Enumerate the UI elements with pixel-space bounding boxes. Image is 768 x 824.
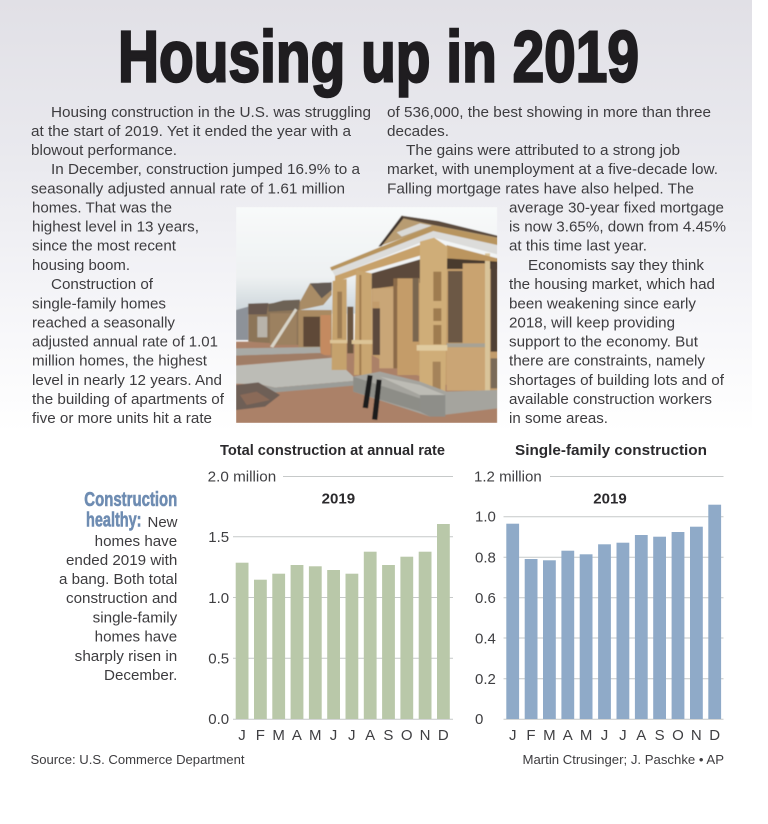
article text: left column: million homes, the highest — [32, 354, 207, 370]
y axis labels: 1.2 million — [474, 469, 542, 486]
article text: right column: average 30-year fixed mortgage — [509, 200, 724, 216]
bars — [236, 524, 450, 719]
concrete slabs — [236, 347, 321, 356]
month labels: S — [655, 727, 665, 744]
month labels: J — [238, 727, 246, 744]
month labels — [238, 727, 449, 744]
article text: right column: Falling mortgage rates have also helped. The — [387, 182, 694, 198]
bars — [506, 505, 721, 719]
article text: left column: single-family homes — [32, 296, 166, 312]
article text: right column: shortages of building lots and of — [509, 373, 725, 389]
article text: right column: market, with unemployment at a five-decade low. — [387, 162, 718, 178]
article text: left column: five or more units hit a rate — [32, 411, 212, 427]
far houses — [236, 307, 248, 340]
y axis labels: 1.0 — [475, 509, 496, 526]
sidebar: construction healthy: sharply risen in — [75, 649, 177, 665]
sidebar: construction healthy: ended 2019 with — [66, 553, 177, 569]
foundation — [353, 372, 497, 417]
article text: left column: adjusted annual rate of 1.01 — [32, 335, 218, 351]
article text: right column: the housing market, which had — [509, 277, 715, 293]
month labels: J — [509, 727, 516, 744]
article text: left column — [31, 105, 371, 427]
month labels: F — [526, 727, 536, 744]
article text: right column: been weakening since early — [509, 296, 697, 312]
black pipes — [363, 375, 373, 408]
month labels: M — [309, 727, 321, 744]
month labels: O — [401, 727, 413, 744]
article text: right column: decades. — [387, 124, 449, 140]
source note: Source: U.S. Commerce Department — [30, 752, 245, 767]
year label: 2019 — [322, 492, 355, 508]
sidebar: construction healthy: New — [148, 515, 178, 531]
porch columns — [332, 279, 347, 370]
y axis labels: 1.0 — [208, 590, 229, 607]
y axis labels: 0.4 — [475, 630, 496, 647]
article text: left column: Housing construction in the U.S. was struggling — [51, 105, 371, 121]
y axis labels — [474, 469, 542, 728]
month labels: F — [256, 727, 265, 744]
month labels: A — [563, 727, 573, 744]
sidebar: construction healthy: Construction — [84, 489, 177, 511]
photo: houses under construction — [236, 207, 497, 423]
article text: left column: seasonally adjusted annual rate of 1.61 million — [31, 182, 345, 198]
gridlines — [504, 476, 724, 719]
article text: left column: reached a seasonally — [32, 315, 176, 331]
month labels: J — [330, 727, 337, 744]
y axis labels: 0.6 — [475, 590, 496, 607]
month labels: J — [348, 727, 356, 744]
gable — [382, 218, 498, 246]
chart title: Single-family construction — [515, 443, 707, 459]
article text: right column: there are constraints, namely — [509, 354, 706, 370]
month labels: A — [365, 727, 375, 744]
y axis labels: 2.0 million — [208, 469, 276, 486]
sidebar: construction healthy: construction and — [66, 591, 177, 607]
month labels: J — [619, 727, 627, 744]
month labels: N — [691, 727, 702, 744]
month labels: S — [383, 727, 393, 744]
y axis labels: 1.5 — [208, 529, 229, 546]
main house wall — [372, 260, 497, 395]
month labels: D — [709, 727, 720, 744]
sidebar: construction healthy: single-family — [93, 610, 178, 626]
sidebar: construction healthy: December. — [104, 668, 177, 684]
month labels: A — [636, 727, 646, 744]
y axis labels: 0 — [475, 711, 483, 728]
chart: single-family construction — [474, 443, 724, 744]
article text: right column: in some areas. — [509, 411, 608, 427]
month labels — [509, 727, 720, 744]
y axis labels: 0.2 — [475, 671, 496, 688]
article text: left column: level in nearly 12 years. And — [32, 373, 222, 389]
article text: right column: The gains were attributed to a strong job — [406, 143, 680, 159]
article text: right column: support to the economy. But — [509, 335, 698, 351]
background panel — [0, 0, 752, 432]
month labels: J — [601, 727, 608, 744]
article text: right column: is now 3.65%, down from 4.45% — [509, 220, 726, 236]
article text: left column: In December, construction jumped 16.9% to a — [51, 162, 361, 178]
month labels: M — [543, 727, 556, 744]
y axis labels — [208, 469, 276, 728]
y axis labels: 0.8 — [475, 550, 496, 566]
article text: left column: blowout performance. — [31, 143, 177, 159]
article text: right column: Economists say they think — [528, 258, 705, 274]
month labels: A — [292, 727, 302, 744]
article text: right column: of 536,000, the best showing in more than three — [387, 105, 711, 121]
month labels: O — [672, 727, 684, 744]
month labels: D — [438, 727, 449, 744]
article text: left column: Construction of — [51, 277, 154, 293]
month labels: N — [420, 727, 430, 744]
roof fascia — [332, 230, 497, 276]
chart: total construction at annual rate — [208, 443, 453, 744]
year label: 2019 — [593, 492, 627, 508]
month labels: M — [272, 727, 285, 744]
article text: left column: housing boom. — [32, 258, 130, 274]
sidebar: construction healthy: homes have — [95, 630, 177, 646]
sidebar: construction healthy: a bang. Both total — [59, 572, 177, 588]
article text: right column: 2018, will keep providing — [509, 315, 675, 331]
sidebar: construction healthy: healthy: — [86, 510, 142, 532]
article text: left column: homes. That was the — [32, 200, 172, 216]
article text: right column: available construction workers — [509, 392, 712, 408]
month labels: M — [580, 727, 592, 744]
article text: left column: at the start of 2019. Yet it ended the year with a — [31, 124, 352, 140]
article text: left column: since the most recent — [32, 239, 176, 255]
gridlines — [233, 476, 453, 719]
y axis labels: 0.5 — [208, 651, 229, 668]
article text: left column: the building of apartments of — [32, 392, 225, 408]
article text: right column: at this time last year. — [509, 239, 647, 255]
article text: left column: highest level in 13 years, — [32, 220, 199, 236]
sidebar: construction healthy — [59, 489, 178, 684]
title: Housing up in 2019 — [118, 18, 639, 98]
credit: Martin Ctrusinger; J. Paschke • AP — [522, 752, 724, 767]
chart title: Total construction at annual rate — [220, 443, 445, 459]
article text: right column — [387, 105, 726, 427]
y axis labels: 0.0 — [208, 711, 229, 728]
sidebar: construction healthy: homes have — [95, 534, 177, 550]
rubble — [236, 382, 280, 410]
